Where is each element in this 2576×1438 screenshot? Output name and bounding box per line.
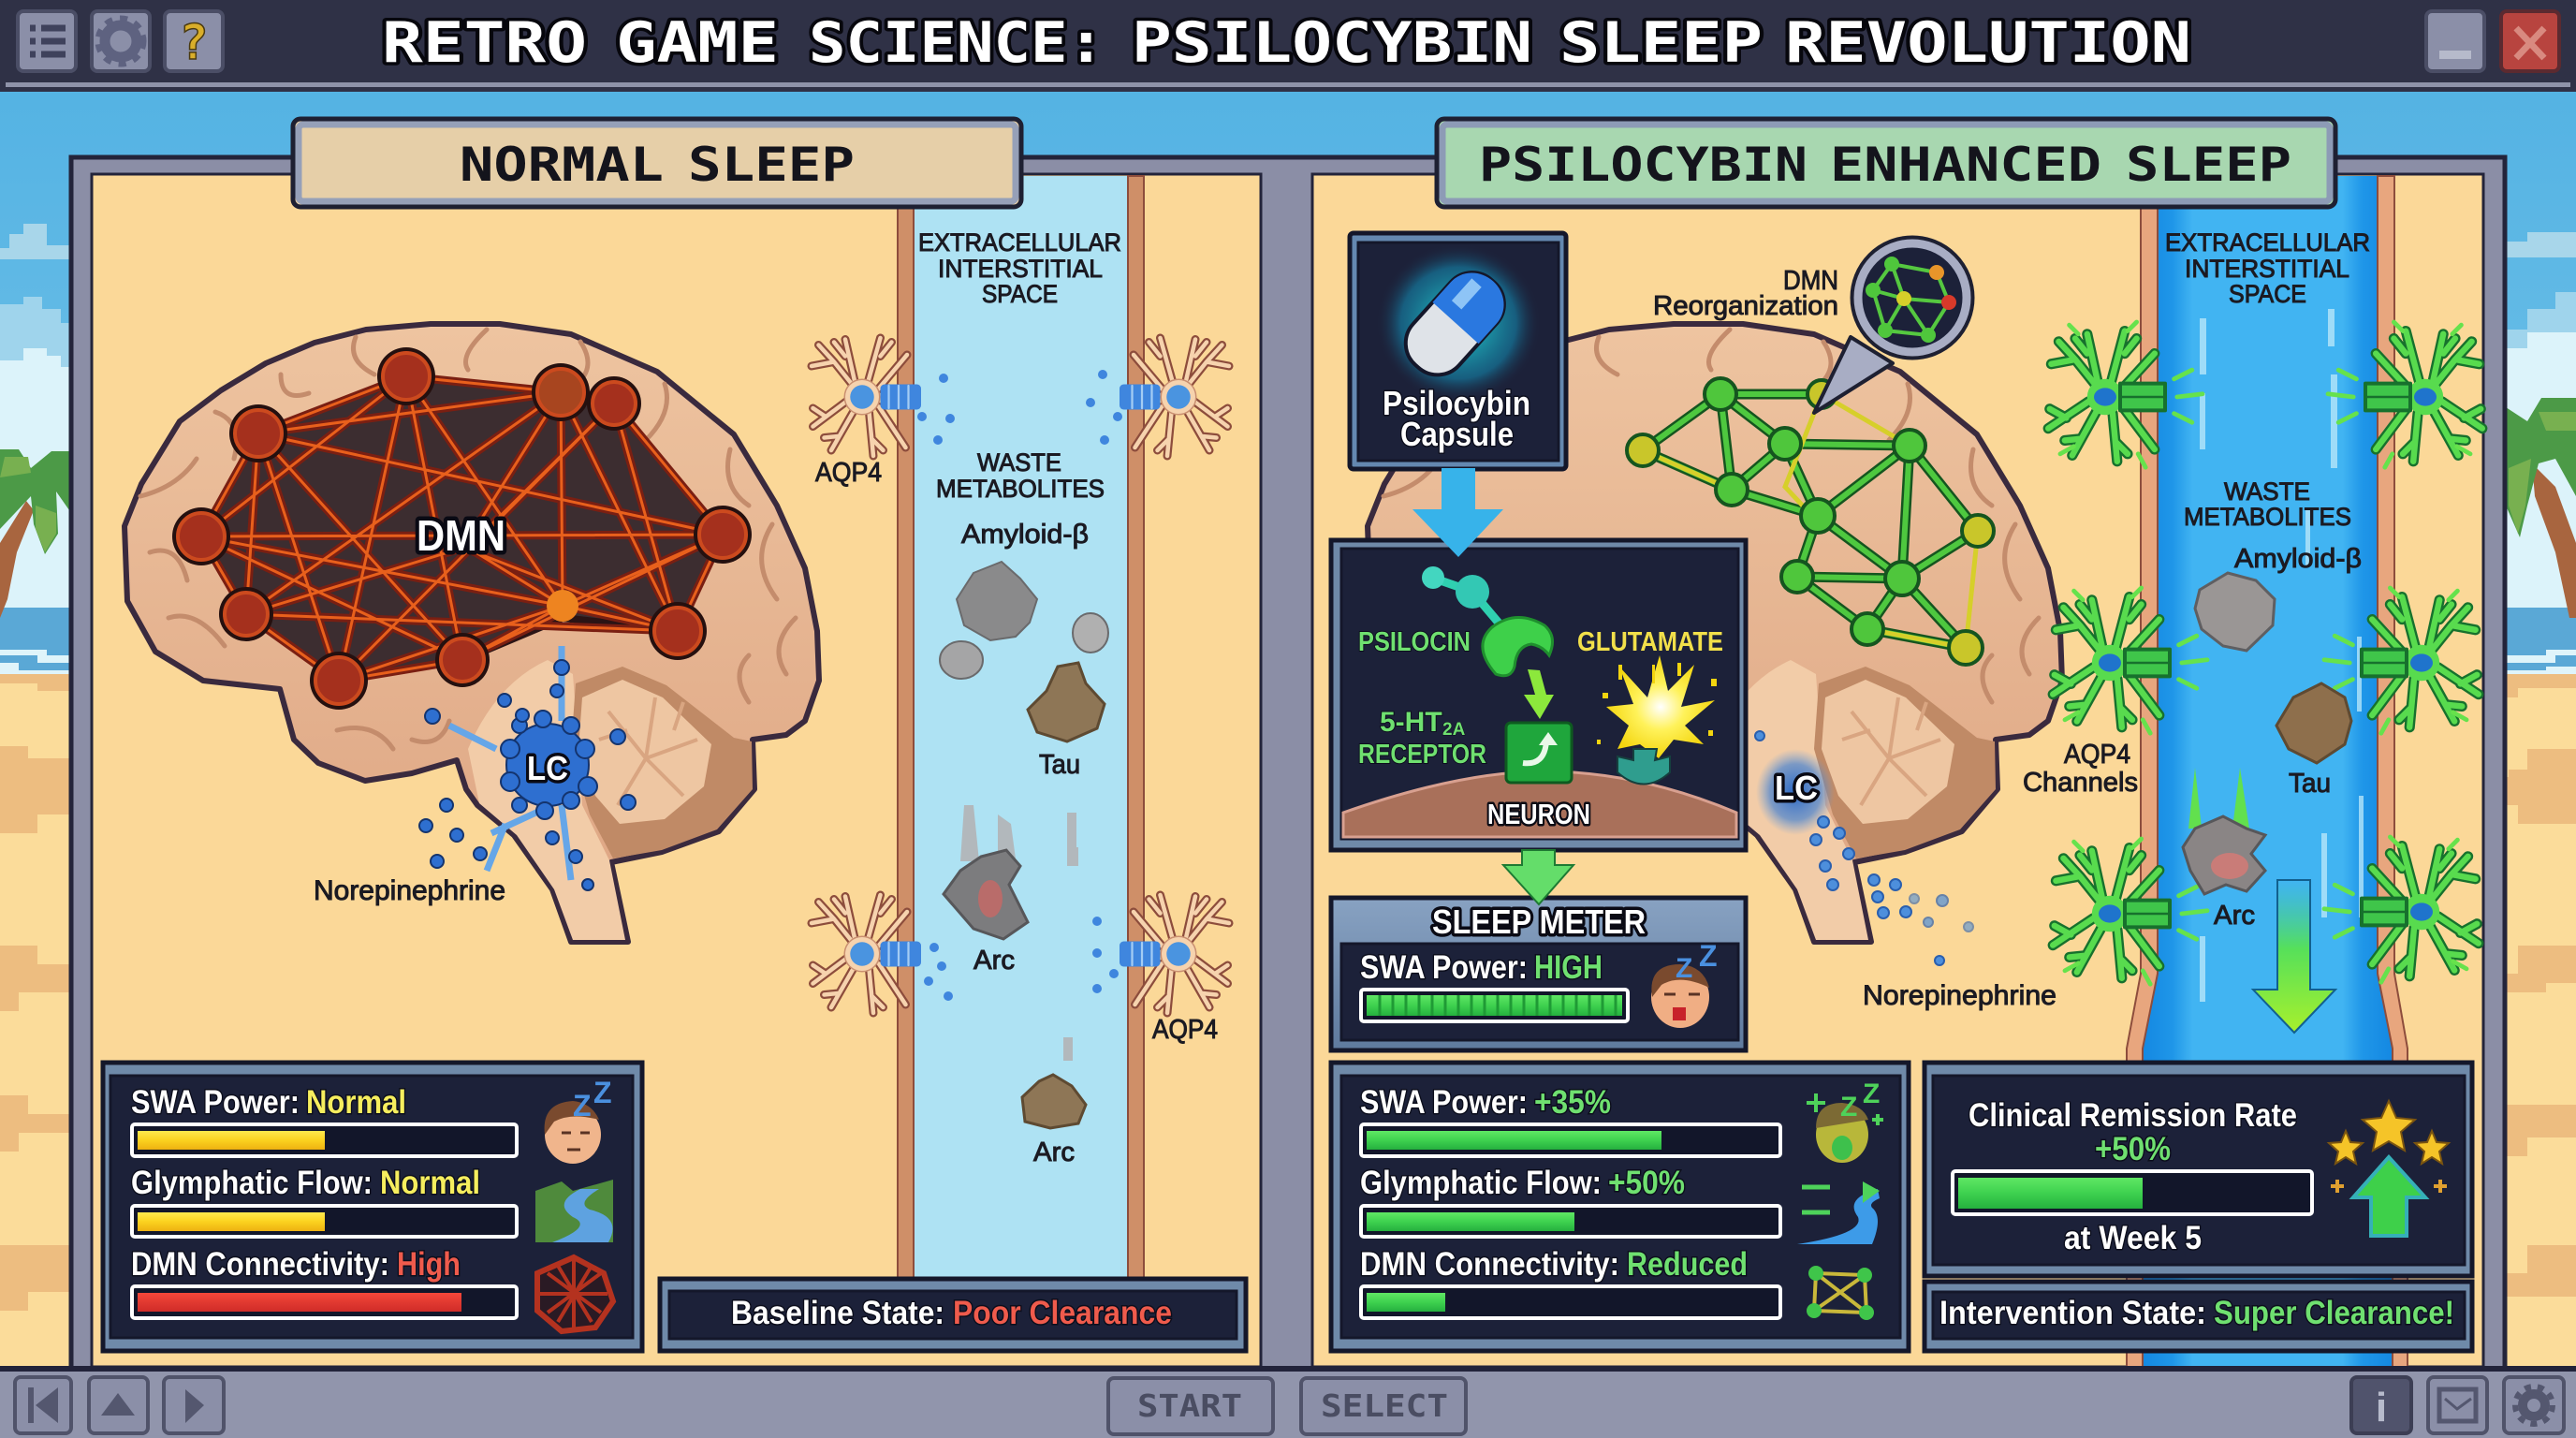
arrow: waste flow down xyxy=(2253,880,2335,1033)
label: psilocybin capsule: Psilocybin xyxy=(1383,384,1530,422)
label: extracellular space: EXTRACELLULAR xyxy=(918,228,1121,257)
label: waste metabolites: WASTE xyxy=(977,448,1061,477)
label: clinical remission rate: Clinical Remission Rate xyxy=(1969,1097,2297,1134)
stat: glymphatic flow normal: Normal xyxy=(380,1165,480,1201)
waste: amyloid clumps xyxy=(940,562,1108,679)
LC glow xyxy=(1756,749,1835,835)
background: sea left xyxy=(0,608,75,676)
background: clouds right xyxy=(2506,232,2576,609)
label: extracellular space xyxy=(918,228,1121,308)
green network nodes xyxy=(1627,378,1994,665)
waste: tau clump xyxy=(2276,683,2351,763)
label: 5-HT2A receptor: 5-HT xyxy=(1380,707,1442,738)
button: menu xyxy=(18,11,76,71)
dark DMN region xyxy=(201,376,723,681)
icon: river xyxy=(535,1180,613,1242)
label: norepinephrine: Norepinephrine xyxy=(1863,980,2056,1011)
header plate: psilocybin enhanced sleep xyxy=(1437,119,2335,207)
button: info: i xyxy=(2376,1385,2387,1431)
intervention state box: Intervention State: xyxy=(1939,1295,2206,1331)
stat: DMN connectivity high: High xyxy=(397,1246,461,1283)
bar: remission xyxy=(1953,1171,2312,1214)
icon: receptor box xyxy=(1506,723,1572,783)
astrocyte top right xyxy=(1120,338,1229,456)
label: psilocybin capsule: Capsule xyxy=(1400,415,1514,453)
astrocyte middle left xyxy=(2053,588,2207,733)
stat: DMN connectivity reduced: Reduced xyxy=(1627,1246,1748,1283)
button: help xyxy=(165,11,223,71)
mechanism panel xyxy=(1331,540,1746,850)
bar: SWA power xyxy=(132,1124,517,1156)
label: 5-HT2A receptor: 2A xyxy=(1442,720,1466,740)
label: LC: LC xyxy=(527,749,568,787)
astrocyte middle right xyxy=(2324,588,2479,733)
main window frame xyxy=(71,157,2505,1371)
label: psilocin: PSILOCIN xyxy=(1358,627,1471,657)
DMN nodes xyxy=(172,347,752,710)
baseline state box: Baseline State: xyxy=(731,1295,944,1331)
icon: reduced network xyxy=(1807,1266,1874,1320)
icon: red network xyxy=(537,1257,613,1331)
header plate: psilocybin enhanced sleep: SLEEP xyxy=(2126,138,2291,192)
astrocyte upper left xyxy=(2048,322,2203,467)
heading: sleep meter: SLEEP METER xyxy=(1432,902,1646,941)
intervention state box xyxy=(1925,1282,2472,1351)
arrow: mechanism to sleep meter xyxy=(1503,850,1573,904)
astrocyte lower left xyxy=(2053,839,2207,984)
button: window xyxy=(2428,1377,2487,1433)
stat: DMN connectivity reduced: DMN Connectivity: xyxy=(1360,1246,1619,1283)
brain with reorganized network xyxy=(1368,324,2062,965)
stat: glymphatic flow +50%: +50% xyxy=(1608,1165,1685,1201)
button: select: SELECT xyxy=(1321,1387,1448,1424)
value: +50%: +50% xyxy=(2095,1131,2171,1167)
icon: glutamate burst xyxy=(1597,655,1717,785)
bar: SWA power high xyxy=(1361,990,1628,1021)
label: 5-HT2A receptor: RECEPTOR xyxy=(1358,740,1486,770)
norepinephrine dots xyxy=(1755,731,1973,965)
label: extracellular space: INTERSTITIAL xyxy=(938,255,1103,283)
title: SCIENCE: xyxy=(809,10,1105,76)
bottom control bar xyxy=(0,1366,2576,1438)
label: glutamate: GLUTAMATE xyxy=(1577,627,1723,657)
stat: SWA power high: HIGH xyxy=(1534,949,1603,986)
title: REVOLUTION xyxy=(1785,10,2191,76)
label: extracellular space: SPACE xyxy=(982,280,1058,308)
label: amyloid-beta: Amyloid-β xyxy=(961,520,1089,550)
label: DMN reorganization: DMN xyxy=(1783,266,1838,296)
neuron membrane xyxy=(1343,771,1736,837)
label: DMN: DMN xyxy=(417,511,505,560)
header plate: psilocybin enhanced sleep: PSILOCYBIN xyxy=(1479,138,1808,192)
label: amyloid-beta: Amyloid-β xyxy=(2234,544,2362,574)
label: norepinephrine: Norepinephrine xyxy=(314,875,505,906)
stat: SWA power +35%: +35% xyxy=(1534,1084,1611,1121)
label: waste metabolites: WASTE xyxy=(2224,477,2310,506)
button: next xyxy=(164,1377,224,1433)
stat: glymphatic flow +50%: Glymphatic Flow: xyxy=(1360,1165,1602,1201)
button: previous xyxy=(15,1377,71,1433)
river channel xyxy=(2127,176,2408,1367)
icon: sparkles xyxy=(2331,1180,2447,1193)
extracellular channel xyxy=(898,176,1144,1281)
label: AQP4 channels: AQP4 xyxy=(2064,740,2130,770)
label: tau: Tau xyxy=(1039,750,1080,780)
label: AQP4 channels xyxy=(2023,740,2138,798)
waste: amyloid clump xyxy=(2195,573,2275,651)
icon: deep sleeping face xyxy=(1651,939,1718,1028)
title: SLEEP xyxy=(1559,10,1763,76)
label: arc upper: Arc xyxy=(973,946,1015,976)
title: GAME xyxy=(616,10,779,76)
panel: clinical remission xyxy=(1925,1063,2472,1276)
icon: glowing sleeping head xyxy=(1807,1078,1883,1163)
button: settings xyxy=(92,11,150,71)
icon: sleeping head xyxy=(545,1076,612,1164)
arrow: capsule to mechanism xyxy=(1412,468,1503,557)
intervention state box: Super Clearance! xyxy=(2214,1295,2454,1331)
waste: arc clump with smoke xyxy=(944,805,1078,939)
label: waste metabolites: METABOLITES xyxy=(936,475,1105,503)
DMN edges xyxy=(201,376,723,681)
header plate: normal sleep: SLEEP xyxy=(688,138,855,192)
background: clouds left xyxy=(0,224,69,609)
LC burst and norepinephrine xyxy=(419,646,636,890)
icon: deep sleeping face: Z xyxy=(1699,939,1718,973)
top window bar xyxy=(0,0,2576,92)
astrocyte top left xyxy=(812,338,921,456)
icon: sleeping head: Z xyxy=(593,1076,612,1109)
button: up xyxy=(89,1377,148,1433)
label: neuron: NEURON xyxy=(1487,798,1590,830)
baseline state box: Poor Clearance xyxy=(953,1295,1172,1331)
icon: deep sleeping face: Z xyxy=(1676,953,1692,984)
label: waste metabolites xyxy=(2184,477,2351,531)
header plate: normal sleep: NORMAL xyxy=(460,138,664,192)
stat: DMN connectivity high: DMN Connectivity: xyxy=(131,1246,389,1283)
label: arc lower: Arc xyxy=(1033,1137,1075,1167)
label: arc: Arc xyxy=(2214,901,2255,931)
button: minimize xyxy=(2426,11,2484,71)
label: DMN reorganization xyxy=(1653,266,1838,321)
waste: tau clump xyxy=(1028,663,1105,741)
psilocin molecule xyxy=(1422,566,1553,676)
label: AQP4 channels: Channels xyxy=(2023,768,2138,798)
title: PSILOCYBIN xyxy=(1132,10,1532,76)
stat: SWA power normal: SWA Power: xyxy=(131,1084,300,1121)
baseline state box xyxy=(660,1279,1246,1351)
callout: DMN reorganization bubble xyxy=(1814,238,1972,413)
bar: SWA power xyxy=(1361,1124,1780,1156)
label: psilocybin capsule xyxy=(1383,384,1530,453)
green network edges xyxy=(1643,394,1978,648)
button: help: ? xyxy=(179,15,209,71)
label: at week 5: at Week 5 xyxy=(2064,1220,2202,1256)
button: start xyxy=(1108,1378,1273,1434)
label: DMN reorganization: Reorganization xyxy=(1653,291,1838,321)
background: sand xyxy=(0,674,2576,1372)
capsule panel xyxy=(1350,233,1566,469)
title xyxy=(382,10,2191,76)
header plate: psilocybin enhanced sleep: ENHANCED xyxy=(1830,138,2101,192)
astrocyte bottom right xyxy=(1120,895,1229,1013)
stat: SWA power normal: Normal xyxy=(306,1084,406,1121)
panel: psilocybin enhanced sleep xyxy=(1312,174,2483,1367)
bar: glymphatic flow xyxy=(1361,1206,1780,1237)
icon: fast river xyxy=(1797,1181,1880,1244)
label: extracellular space xyxy=(2165,228,2370,308)
button: select xyxy=(1301,1378,1466,1434)
astrocyte bottom left xyxy=(812,895,921,1013)
icon: palm tree left xyxy=(0,449,69,618)
waste: arc clump xyxy=(2183,768,2265,894)
stat: glymphatic flow normal: Glymphatic Flow: xyxy=(131,1165,373,1201)
waste: arc clump lower xyxy=(1022,1037,1086,1128)
panel: normal sleep xyxy=(92,174,1261,1367)
icon: sleeping head: Z xyxy=(573,1089,592,1123)
header plate: normal sleep xyxy=(293,119,1021,207)
label: extracellular space: INTERSTITIAL xyxy=(2185,255,2349,283)
arrow: psilocin to receptor xyxy=(1524,669,1554,719)
button: start: START xyxy=(1137,1387,1242,1424)
astrocyte lower right xyxy=(2324,837,2479,982)
label: AQP4 top: AQP4 xyxy=(815,458,882,488)
icon: capsule xyxy=(1376,243,1541,403)
stat: SWA power normal xyxy=(131,1084,406,1121)
label: extracellular space: SPACE xyxy=(2229,280,2306,308)
icon: glowing sleeping head: Z xyxy=(1840,1092,1857,1123)
label: waste metabolites: METABOLITES xyxy=(2184,503,2351,531)
bar: DMN connectivity xyxy=(1361,1286,1780,1318)
label: AQP4 bottom: AQP4 xyxy=(1152,1015,1218,1045)
button: info xyxy=(2351,1377,2411,1433)
bar: glymphatic flow xyxy=(132,1206,517,1237)
icon: stars xyxy=(2329,1101,2449,1164)
brain with DMN network xyxy=(124,324,819,942)
icon: up arrow xyxy=(2353,1157,2425,1236)
sleep meter panel xyxy=(1331,898,1746,1050)
bar: DMN connectivity xyxy=(132,1286,517,1318)
astrocyte upper right xyxy=(2328,322,2482,467)
label: extracellular space: EXTRACELLULAR xyxy=(2165,228,2370,257)
icon: palm tree right xyxy=(2506,398,2576,618)
button: gear xyxy=(2504,1377,2564,1433)
label: tau: Tau xyxy=(2289,769,2331,799)
icon: glowing sleeping head: Z xyxy=(1863,1078,1880,1109)
stat: SWA power high: SWA Power: xyxy=(1360,949,1528,986)
label: waste metabolites xyxy=(936,448,1105,503)
stat: SWA power +35%: SWA Power: xyxy=(1360,1084,1528,1121)
panel: baseline stats xyxy=(103,1063,642,1351)
background: sea right xyxy=(2499,608,2576,676)
panel: intervention stats xyxy=(1331,1063,1909,1351)
title: RETRO xyxy=(382,10,587,76)
label: LC: LC xyxy=(1775,769,1818,807)
label: 5-HT2A receptor xyxy=(1358,707,1486,770)
background: sky xyxy=(0,0,2576,618)
water droplets xyxy=(917,370,1122,1001)
button: close xyxy=(2501,11,2559,71)
